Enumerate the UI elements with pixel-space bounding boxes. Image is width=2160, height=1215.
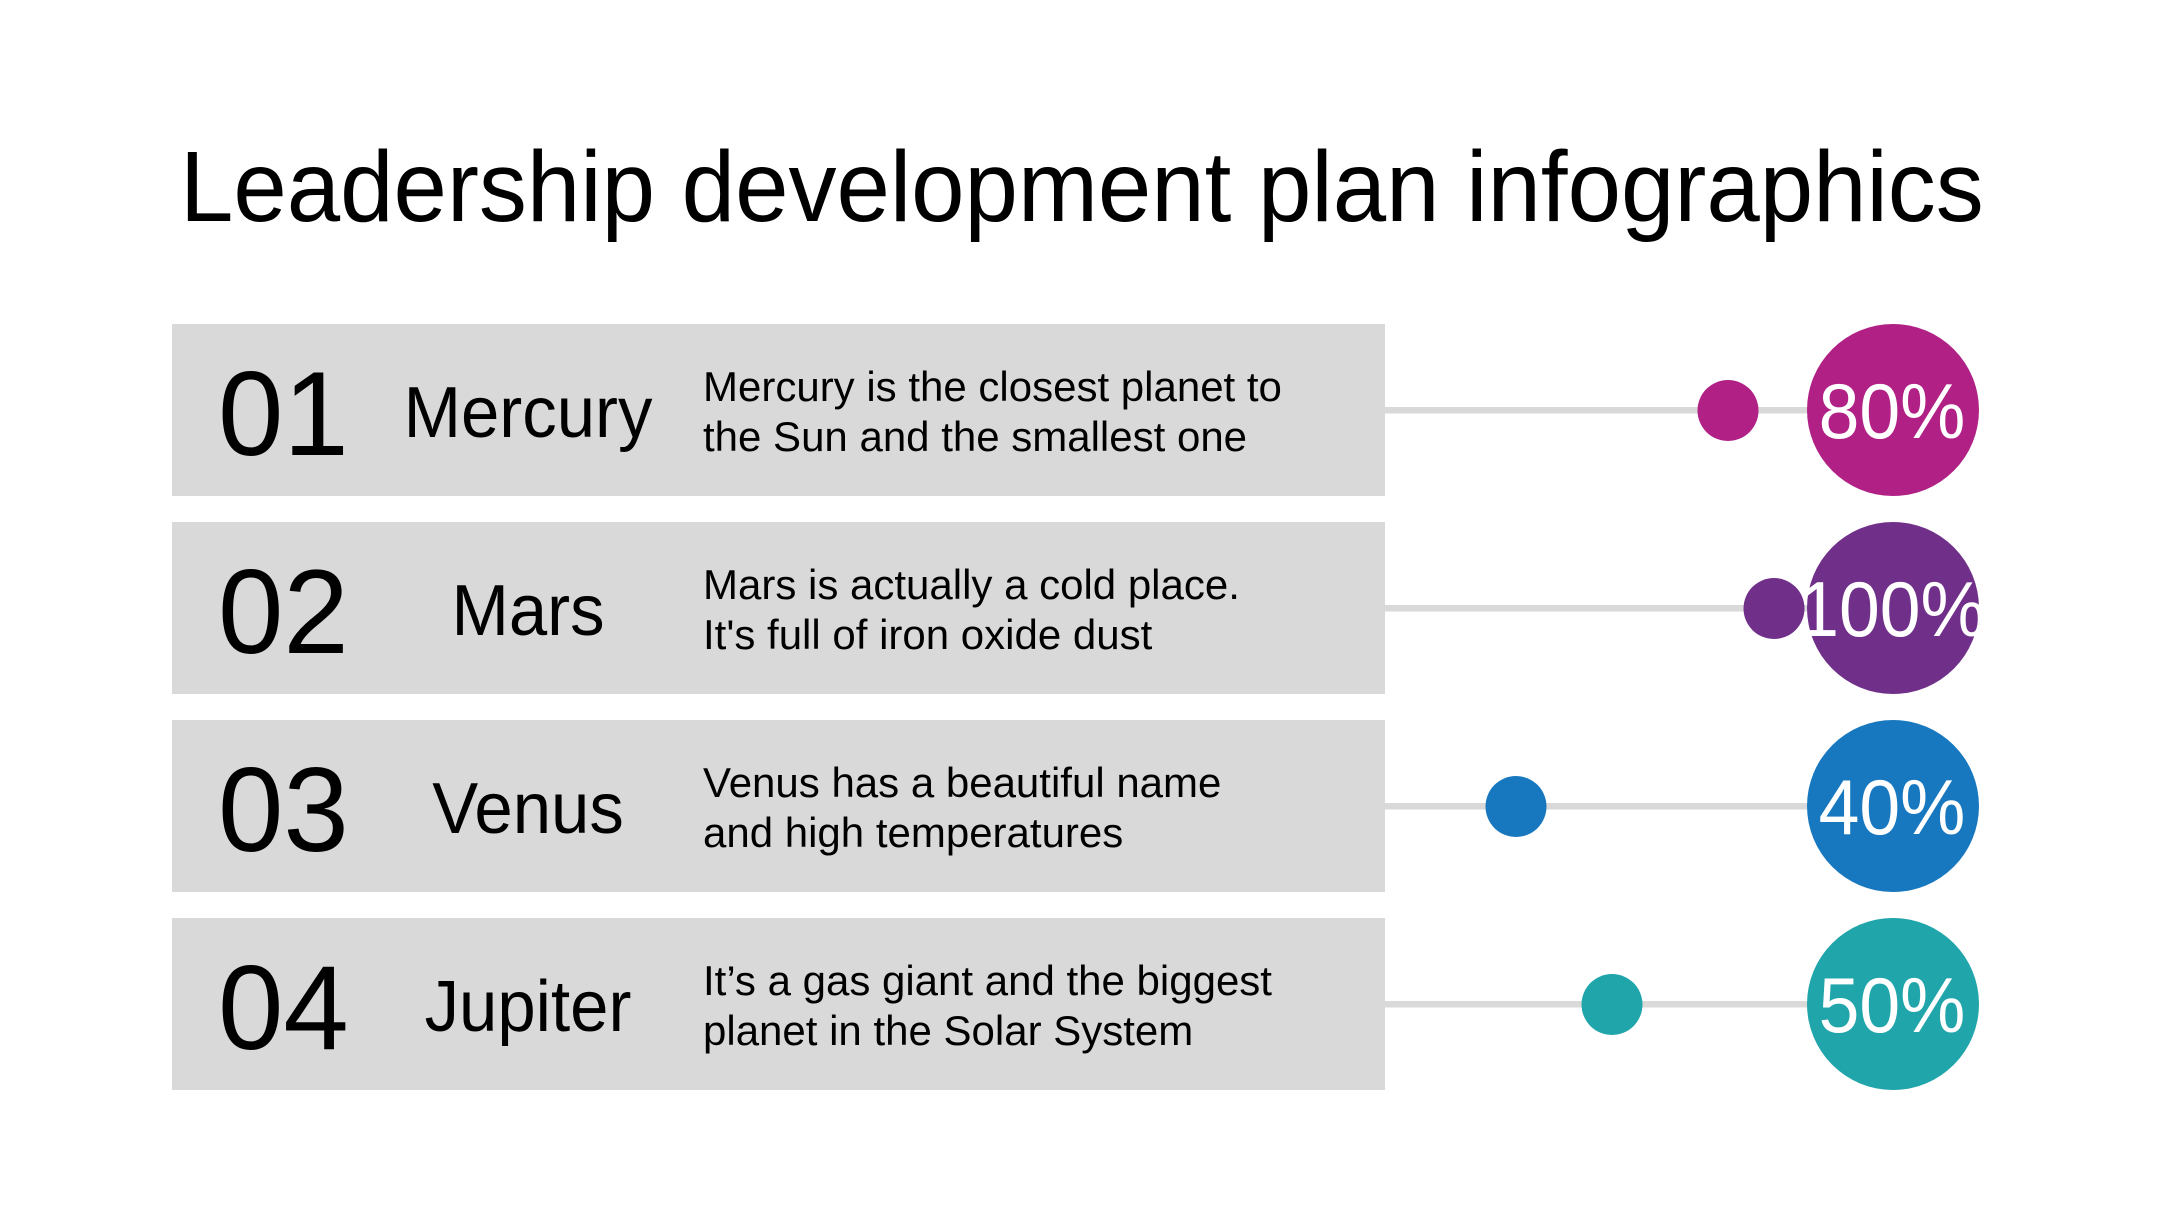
panel: Mercury card bbox=[172, 324, 1385, 496]
panel: Jupiter card bbox=[172, 918, 1385, 1090]
description: Venus: Venus has a beautiful name bbox=[703, 759, 1221, 806]
name: Venus: Venus bbox=[432, 768, 624, 848]
name: Mars: Mars bbox=[451, 570, 605, 650]
number 01: 01 bbox=[218, 347, 349, 481]
description: Jupiter: It’s a gas giant and the biggest bbox=[703, 957, 1272, 1004]
progress track: Jupiter bbox=[1385, 1001, 1815, 1008]
percent circle: 50% bbox=[1807, 918, 1979, 1090]
description: Venus: and high temperatures bbox=[703, 809, 1123, 856]
name: Jupiter: Jupiter bbox=[425, 966, 631, 1046]
percent circle: 40% bbox=[1807, 720, 1979, 892]
progress dot: Jupiter bbox=[1582, 974, 1642, 1035]
name: Mercury: Mercury bbox=[404, 372, 653, 452]
panel: Mars card bbox=[172, 522, 1385, 694]
description: Mars: Mars is actually a cold place. bbox=[703, 561, 1240, 608]
percent circle: 100% bbox=[1798, 522, 1986, 694]
percent circle: 100%: 100% bbox=[1798, 566, 1986, 654]
progress dot: Venus bbox=[1486, 776, 1546, 837]
number 04: 04 bbox=[218, 941, 349, 1075]
percent circle: 40%: 40% bbox=[1819, 764, 1965, 852]
progress dot: Mercury bbox=[1698, 380, 1758, 441]
percent circle: 80%: 80% bbox=[1819, 368, 1965, 456]
description: Mercury: Mercury is the closest planet to bbox=[703, 363, 1282, 410]
title: Leadership development plan infographics bbox=[180, 130, 1984, 242]
row 4: Jupiter bbox=[172, 918, 1979, 1090]
progress track: Mercury bbox=[1385, 407, 1815, 414]
description: Mercury: the Sun and the smallest one bbox=[703, 413, 1247, 460]
number 02: 02 bbox=[218, 545, 349, 679]
row 3: Venus bbox=[172, 720, 1979, 892]
progress dot: Mars bbox=[1744, 578, 1804, 639]
description: Jupiter: planet in the Solar System bbox=[703, 1007, 1193, 1054]
row 1: Mercury bbox=[172, 324, 1979, 496]
row 2: Mars bbox=[172, 522, 1986, 694]
number 03: 03 bbox=[218, 743, 349, 877]
percent circle: 50%: 50% bbox=[1819, 962, 1965, 1050]
panel: Venus card bbox=[172, 720, 1385, 892]
progress track: Mars bbox=[1385, 605, 1815, 612]
percent circle: 80% bbox=[1807, 324, 1979, 496]
progress track: Venus bbox=[1385, 803, 1815, 810]
description: Mars: It's full of iron oxide dust bbox=[703, 611, 1153, 658]
